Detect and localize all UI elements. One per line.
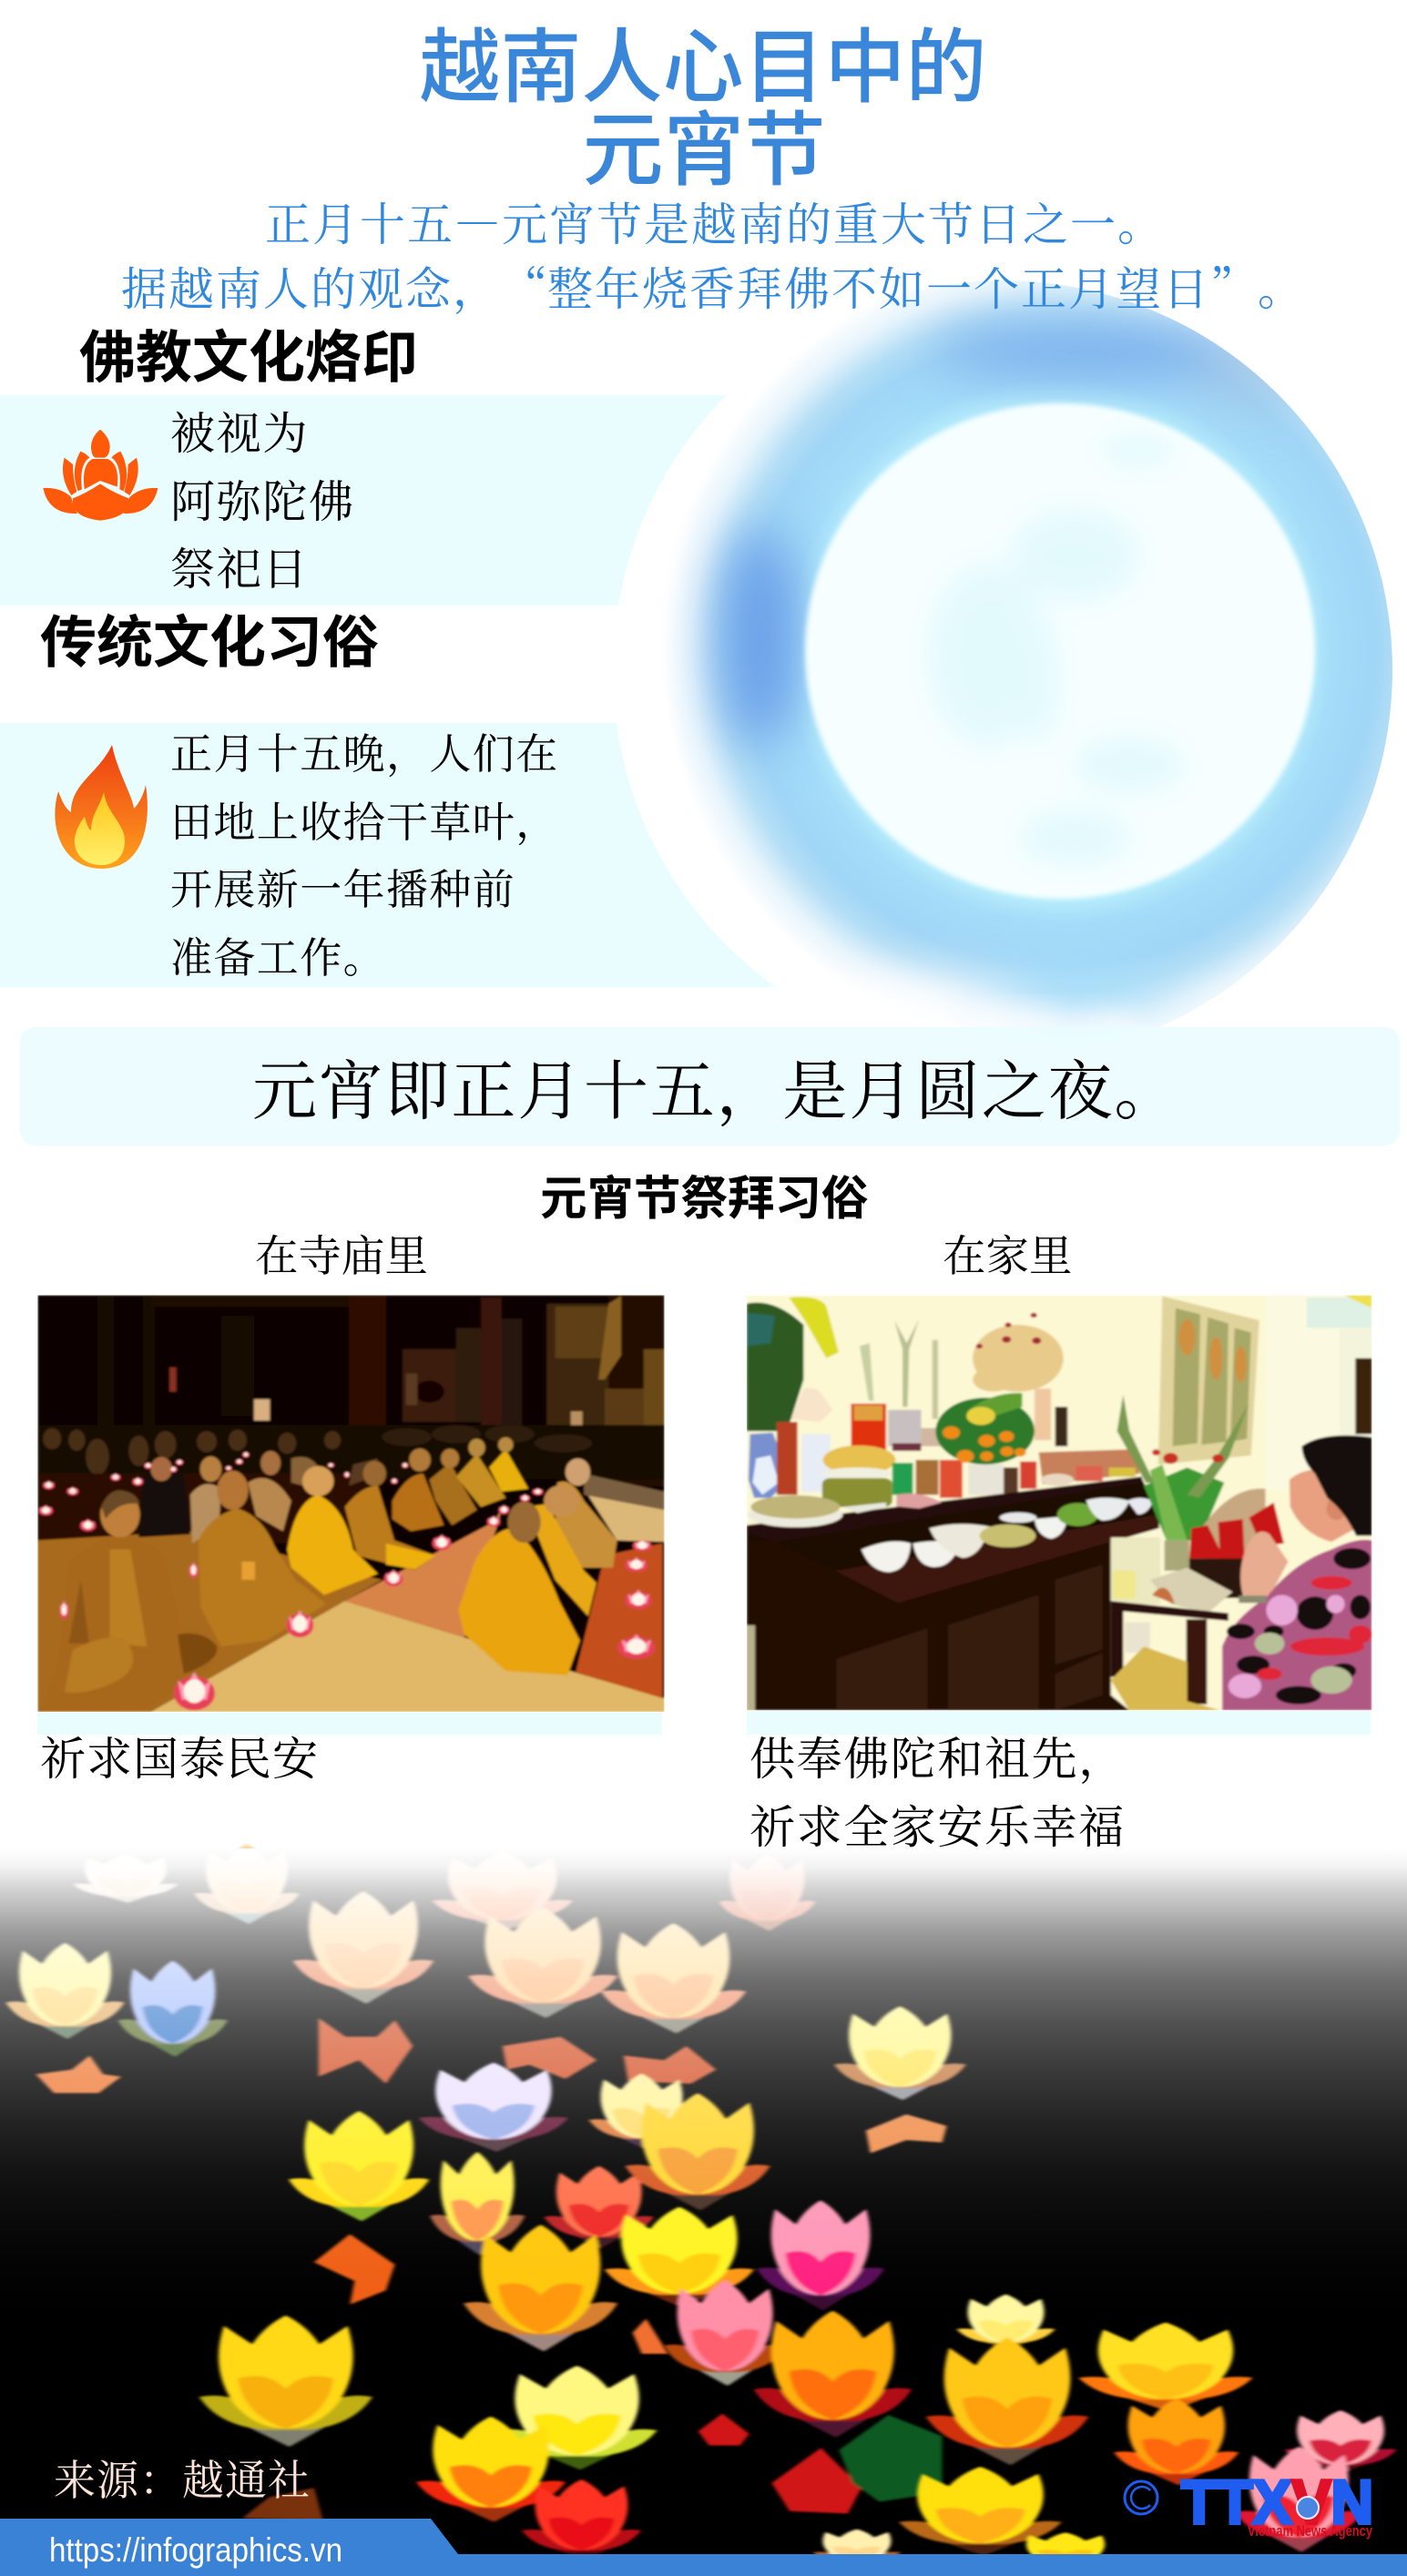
heading: worship customs: 元宵节祭拜习俗: [540, 1172, 869, 1225]
full moon illustration: [601, 273, 1407, 1065]
text: Buddhist culture body: [170, 409, 355, 595]
text: traditional custom body: 正月十五晚，人们在: [170, 731, 559, 778]
text: Buddhist culture body: 阿弥陀佛: [170, 477, 355, 527]
footer bar: [0, 2519, 1407, 2576]
caption: temple wish: 祈求国泰民安: [40, 1734, 319, 1785]
photo: home altar: [747, 1295, 1371, 1710]
photo: monks in temple: [37, 1295, 665, 1712]
moon bright disc: [805, 403, 1315, 899]
TTXVN logo: [1125, 2468, 1373, 2540]
heading: Buddhist culture: 佛教文化烙印: [79, 327, 418, 390]
text: traditional custom body: [170, 731, 559, 982]
caption: home wish: [749, 1734, 1126, 1853]
label: in temple: 在寺庙里: [255, 1234, 428, 1281]
faded lanterns at top: [5, 1844, 966, 2100]
title: [419, 22, 987, 196]
panel: Buddhist culture background: [0, 395, 820, 606]
subtitle text: “: [502, 253, 549, 319]
text: traditional custom body: 田地上收拾干草叶，: [170, 799, 559, 846]
text: Buddhist culture body: 祭祀日: [170, 545, 309, 595]
lower lanterns: [199, 2294, 1397, 2570]
panel: full moon statement: [20, 1027, 1400, 1145]
statement text: 元宵即正月十五，是月圆之夜。: [252, 1057, 1180, 1128]
label: at home: 在家里: [943, 1234, 1073, 1281]
subtitle text: 正月十五—元宵节是越南的重大节日之一。: [265, 188, 1165, 254]
moon clouds: [995, 998, 1133, 1027]
title: 越南人心目中的: [419, 22, 987, 113]
subtitle text: 。: [1258, 264, 1305, 315]
text: traditional custom body: 准备工作。: [170, 935, 386, 982]
copyright sign: [1125, 2481, 1157, 2514]
title: 元宵节: [583, 105, 825, 196]
middle lanterns: [289, 2062, 912, 2438]
heading: traditional custom: 传统文化习俗: [40, 612, 379, 675]
logo wordmark: TTXVN: [1181, 2468, 1373, 2537]
logo globe: [1297, 2497, 1319, 2519]
panel: traditional custom background: [0, 723, 820, 987]
caption: home wish: 供奉佛陀和祖先，: [749, 1734, 1126, 1785]
source credit: 来源：越通社: [54, 2458, 311, 2504]
subtitle text: 据越南人的观念，: [121, 264, 500, 315]
white fade overlay: [0, 1848, 1407, 2313]
icon: flame: [55, 745, 148, 869]
strip below altar photo: [747, 1711, 1371, 1735]
icon: lotus: [43, 430, 158, 521]
text: Buddhist culture body: 被视为: [170, 409, 309, 459]
subtitle text: ”: [1210, 253, 1258, 319]
caption: home wish: 祈求全家安乐幸福: [749, 1802, 1126, 1853]
text: traditional custom body: 开展新一年播种前: [170, 867, 515, 913]
photo: floating lotus lanterns: [0, 1844, 1407, 2576]
subtitle text: [121, 188, 1305, 319]
reflections of lanterns: [36, 2018, 946, 2520]
strip below temple photo: [37, 1713, 662, 1735]
footer URL: https://infographics.vn: [49, 2531, 342, 2569]
subtitle text: 整年烧香拜佛不如一个正月望日: [547, 264, 1210, 315]
